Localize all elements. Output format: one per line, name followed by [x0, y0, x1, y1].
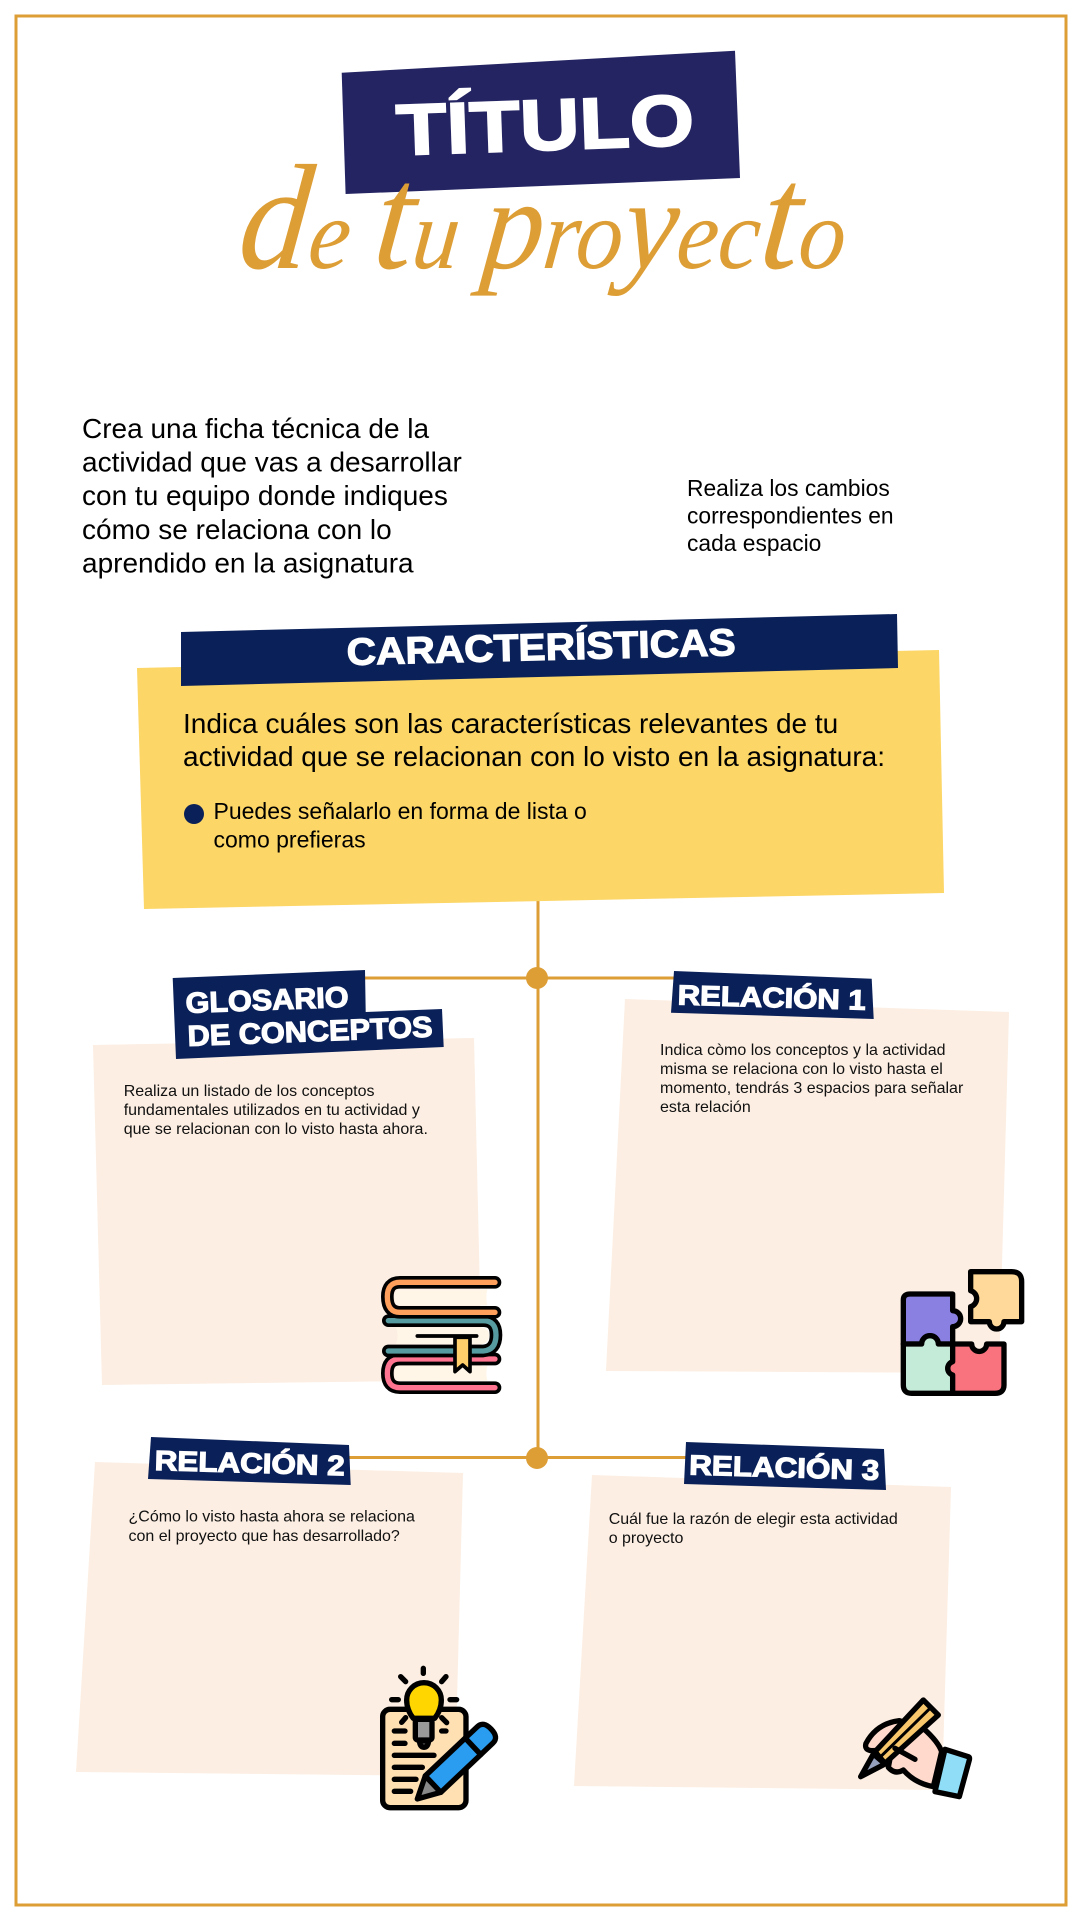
- glosario heading line 2: DE CONCEPTOS: [187, 1012, 433, 1053]
- relación 1 description: esta relación: [660, 1099, 751, 1116]
- relación 3 description: o proyecto: [609, 1530, 684, 1547]
- relación 1 description: Indica còmo los conceptos y la actividad: [660, 1042, 945, 1059]
- relación 1 background: [606, 999, 1009, 1373]
- panel: relación 2: [76, 1437, 499, 1808]
- características heading: CARACTERÍSTICAS: [346, 620, 736, 674]
- yellow panel background: [137, 650, 944, 909]
- relación 3 background: [574, 1475, 951, 1790]
- intro paragraph right: correspondientes en: [687, 503, 894, 529]
- title main word: TÍTULO: [395, 81, 695, 171]
- panel: características: [137, 614, 944, 909]
- intro paragraph left: cómo se relaciona con lo: [82, 514, 392, 545]
- panel: glosario de conceptos: [93, 970, 496, 1388]
- intro paragraph right: Realiza los cambios: [687, 475, 890, 501]
- relación 2 banner: [148, 1437, 351, 1485]
- glosario description: que se relacionan con lo visto hasta ahora.: [124, 1121, 428, 1138]
- relación 3 banner: [684, 1442, 886, 1490]
- intro paragraph left: con tu equipo donde indiques: [82, 480, 448, 511]
- glosario banner: [173, 970, 444, 1059]
- title banner: [342, 51, 740, 194]
- relación 2 background: [76, 1462, 463, 1776]
- bullet text: como prefieras: [214, 826, 366, 852]
- bullet text: Puedes señalarlo en forma de lista o: [214, 798, 587, 824]
- icon: idea and pen on note: [383, 1668, 499, 1808]
- glosario description: Realiza un listado de los conceptos: [124, 1083, 375, 1100]
- intro paragraph left: actividad que vas a desarrollar: [82, 447, 462, 478]
- relación 1 banner: [671, 971, 874, 1019]
- panel: relación 3: [574, 1442, 970, 1797]
- title script line: de tu proyecto: [233, 134, 857, 301]
- características description: Indica cuáles son las características relevantes de tu: [183, 708, 838, 739]
- relación 2 description: ¿Cómo lo visto hasta ahora se relaciona: [128, 1508, 415, 1526]
- relación 3 heading: RELACIÓN 3: [689, 1450, 880, 1486]
- glosario heading line 1: GLOSARIO: [185, 982, 349, 1020]
- panel: relación 1: [606, 971, 1022, 1393]
- relación 1 description: momento, tendrás 3 espacios para señalar: [660, 1080, 964, 1097]
- title block: [233, 51, 857, 301]
- relación 2 heading: RELACIÓN 2: [154, 1445, 345, 1481]
- icon: hand holding pencil: [861, 1700, 970, 1797]
- relación 1 description: misma se relaciona con lo visto hasta el: [660, 1061, 943, 1078]
- glosario background: [93, 1038, 482, 1385]
- relación 2 description: con el proyecto que has desarrollado?: [128, 1528, 400, 1545]
- intro paragraph left: aprendido en la asignatura: [82, 547, 414, 578]
- relación 1 heading: RELACIÓN 1: [677, 980, 866, 1016]
- glosario description: fundamentales utilizados en tu actividad y: [124, 1102, 420, 1119]
- intro paragraph right: cada espacio: [687, 530, 821, 556]
- connector lines: [345, 890, 695, 1469]
- relación 3 description: Cuál fue la razón de elegir esta actividad: [609, 1511, 898, 1528]
- características description: actividad que se relacionan con lo visto en la asignatura:: [183, 741, 885, 772]
- características banner: [181, 614, 898, 686]
- icon: stack of books: [387, 1282, 496, 1388]
- intro paragraph left: Crea una ficha técnica de la: [82, 413, 430, 444]
- icon: puzzle pieces: [903, 1272, 1022, 1393]
- bullet dot: [184, 804, 204, 824]
